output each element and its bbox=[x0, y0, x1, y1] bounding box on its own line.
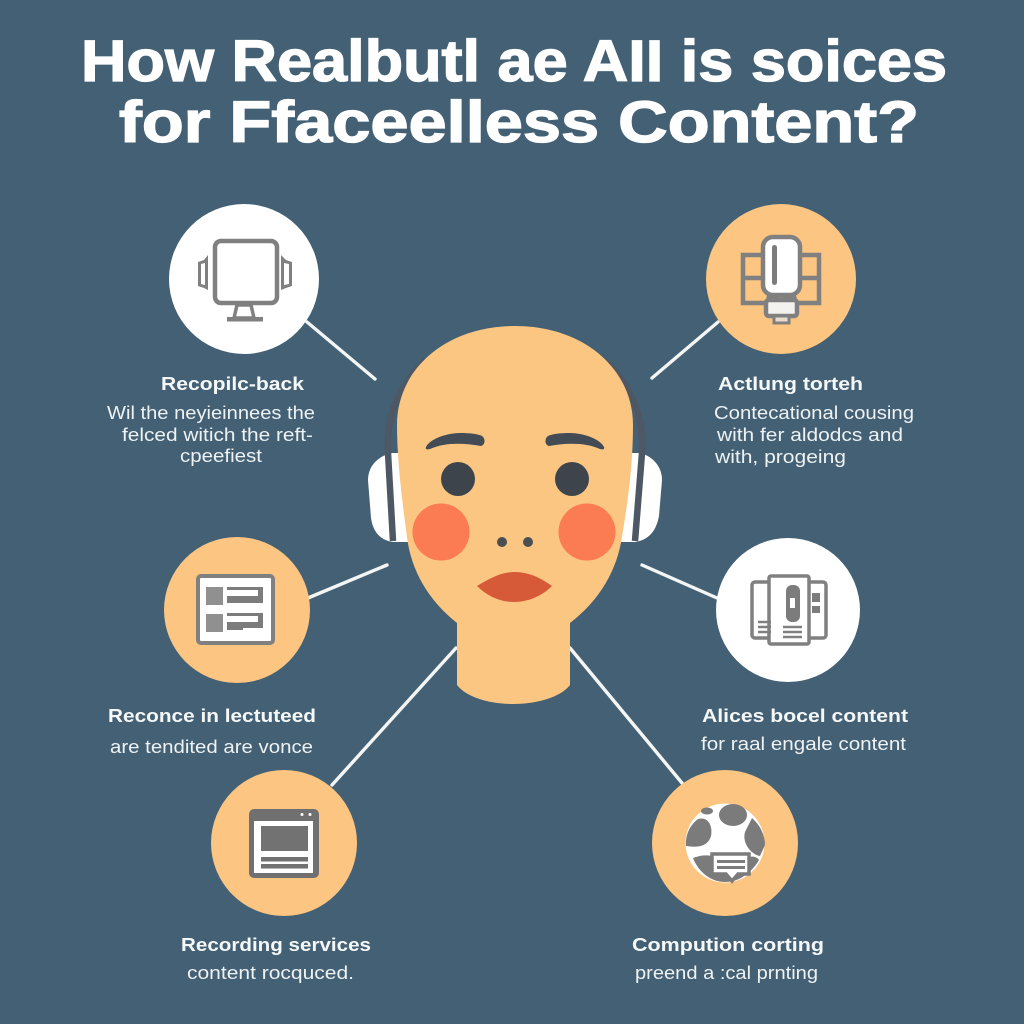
left ear cup bbox=[368, 453, 410, 542]
heading: Alices bocel content bbox=[702, 706, 908, 726]
circle with globe and speech bubble icon bbox=[652, 770, 798, 916]
right ear cup bbox=[618, 453, 662, 542]
eyes bbox=[441, 462, 589, 496]
circle with layout icon bbox=[164, 537, 310, 683]
heading: Actlung torteh bbox=[718, 374, 863, 394]
panel: top left bbox=[107, 204, 319, 466]
panel: middle right bbox=[701, 538, 908, 754]
description: cpeefiest bbox=[180, 446, 262, 466]
description: are tendited are vonce bbox=[110, 737, 313, 757]
circle with microphone icon bbox=[706, 204, 856, 354]
description: preend a :cal prnting bbox=[635, 963, 818, 983]
panel: bottom left bbox=[181, 770, 371, 983]
description: Wil the neyieinnees the bbox=[107, 403, 315, 423]
left eyebrow bbox=[426, 433, 485, 449]
panel: top right bbox=[706, 204, 914, 467]
panel: middle left bbox=[108, 537, 316, 757]
title bbox=[81, 29, 947, 155]
description: with fer aldodcs and bbox=[716, 425, 903, 445]
cheeks bbox=[412, 504, 616, 560]
heading: Recopilc-back bbox=[161, 374, 305, 394]
heading: Compution corting bbox=[632, 935, 824, 955]
description: felced witich the reft- bbox=[122, 425, 313, 445]
description bbox=[107, 403, 315, 466]
mouth bbox=[477, 572, 552, 602]
description: content rocquced. bbox=[187, 963, 354, 983]
panel: bottom right bbox=[632, 770, 824, 983]
nose bbox=[497, 537, 533, 547]
heading: Recording services bbox=[181, 935, 371, 955]
description: Contecational cousing bbox=[714, 403, 914, 423]
face and neck bbox=[397, 326, 633, 704]
circle with documents icon bbox=[716, 538, 860, 682]
headband bbox=[388, 360, 642, 541]
connector lines bbox=[307, 322, 718, 785]
description bbox=[714, 403, 914, 467]
central head with headphones bbox=[368, 326, 662, 704]
description: for raal engale content bbox=[701, 734, 906, 754]
right eyebrow bbox=[545, 433, 604, 449]
title: How Realbutl ae AII is soices bbox=[81, 29, 947, 94]
circle with monitor icon bbox=[169, 204, 319, 354]
description: with, progeing bbox=[714, 447, 846, 467]
title: for Ffaceelless Content? bbox=[119, 90, 919, 155]
circle with browser icon bbox=[211, 770, 357, 916]
heading: Reconce in lectuteed bbox=[108, 706, 316, 726]
